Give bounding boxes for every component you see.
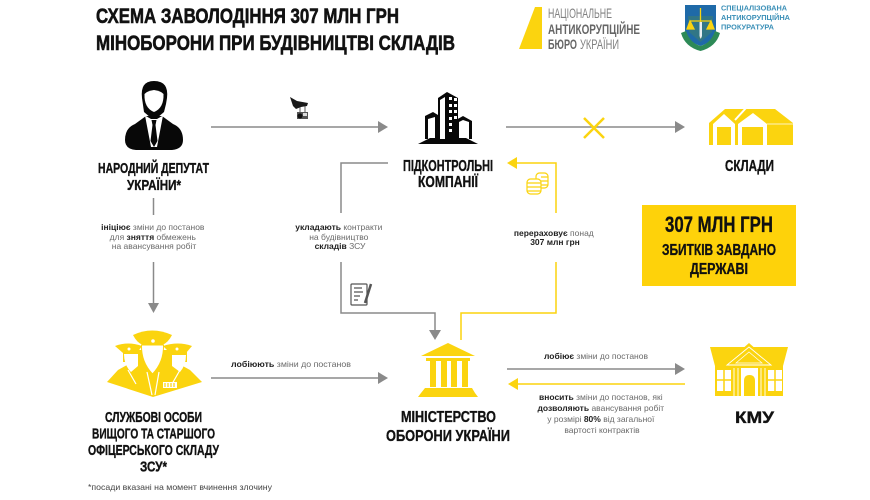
footnote: *посади вказані на момент вчинення злочину [88,482,273,492]
icon: ministry building [418,343,478,397]
text: ministry amends: вносить зміни до постанов, які [539,392,663,402]
logo: SAP: СПЕЦІАЛІЗОВАНА [721,6,787,12]
arrow: ministry to companies [461,157,556,340]
icon: person [125,81,183,150]
text: officers lobby: лобіюють зміни до постанов [231,359,351,369]
logo: NABU: БЮРО [548,36,577,52]
text: ministry amends: вартості контрактів [564,425,640,435]
callout: damage [642,205,796,286]
text: initiates changes: ініціює зміни до постанов [101,222,204,232]
logo: NABU [519,5,640,52]
label: officers [88,410,220,476]
logo: SAP [681,5,790,51]
arrow: companies to ministry [341,163,441,340]
label: officers: ВИЩОГО ТА СТАРШОГО [92,426,215,442]
text: contracts: укладають контракти [295,222,382,232]
label: ministry: ОБОРОНИ УКРАЇНИ [386,427,510,445]
title: СХЕМА ЗАВОЛОДІННЯ 307 МЛН ГРН [96,5,399,28]
panel: companies [403,92,493,191]
icon: officers [107,330,202,397]
label: companies: КОМПАНІЇ [418,174,479,191]
logo: NABU: УКРАЇНИ [580,36,619,52]
label: warehouses: СКЛАДИ [725,158,774,175]
text: initiates changes: для зняття обмежень [110,232,196,242]
label: MP [98,159,209,194]
panel: warehouses [709,108,793,175]
label: companies [403,158,493,191]
text: transfers: перераховує понад [514,228,594,238]
label: officers: СЛУЖБОВІ ОСОБИ [105,410,202,426]
callout: damage: ДЕРЖАВІ [690,261,748,278]
text: ministry amends: дозволяють авансування робіт [537,403,664,413]
label: KMU: КМУ [735,408,774,427]
label: companies: ПІДКОНТРОЛЬНІ [403,158,493,175]
arrow: KMU to ministry [508,378,685,390]
logo: NABU: НАЦІОНАЛЬНЕ [548,5,612,21]
callout: damage: ЗБИТКІВ ЗАВДАНО [662,242,776,259]
label: MP: УКРАЇНИ* [127,177,181,194]
logo: SAP: ПРОКУРАТУРА [721,24,774,32]
text: transfers: 307 млн грн [530,237,580,247]
logo: SAP: АНТИКОРУПЦІЙНА [721,13,790,22]
title [96,5,455,55]
text: ministry lobbies: лобіює зміни до постанов [544,351,648,361]
label: officers: ЗСУ* [140,460,167,476]
text: ministry amends: у розмірі 80% від загальної [547,414,654,424]
panel: ministry [386,343,510,445]
panel: KMU [710,343,788,427]
text: contracts: складів ЗСУ [315,241,365,251]
label: ministry [386,409,510,445]
icon: buildings [418,92,478,144]
label: officers: ОФІЦЕРСЬКОГО СКЛАДУ [88,443,220,459]
arrow: companies to warehouses, crossed [506,118,685,138]
icon: KMU building [710,343,788,396]
panel: MP [98,81,209,194]
arrow: officers to ministry [211,372,388,384]
title: МІНОБОРОНИ ПРИ БУДІВНИЦТВІ СКЛАДІВ [96,32,455,55]
icon: hand with money [290,97,308,119]
callout: damage: 307 МЛН ГРН [665,212,773,237]
icon: contract [351,284,371,305]
panel: officers [88,330,220,476]
label: ministry: МІНІСТЕРСТВО [401,409,496,426]
arrow: ministry to KMU [507,363,685,375]
arrow: MP to officers [148,198,159,313]
arrow: MP to companies [211,121,388,133]
text: contracts: на будівництво [309,232,369,242]
text: initiates changes: на авансування робіт [112,241,196,251]
logo: NABU: АНТИКОРУПЦІЙНЕ [548,20,640,37]
icon: warehouse [709,108,793,145]
label: MP: НАРОДНИЙ ДЕПУТАТ [98,159,209,177]
icon: coins [527,173,548,194]
